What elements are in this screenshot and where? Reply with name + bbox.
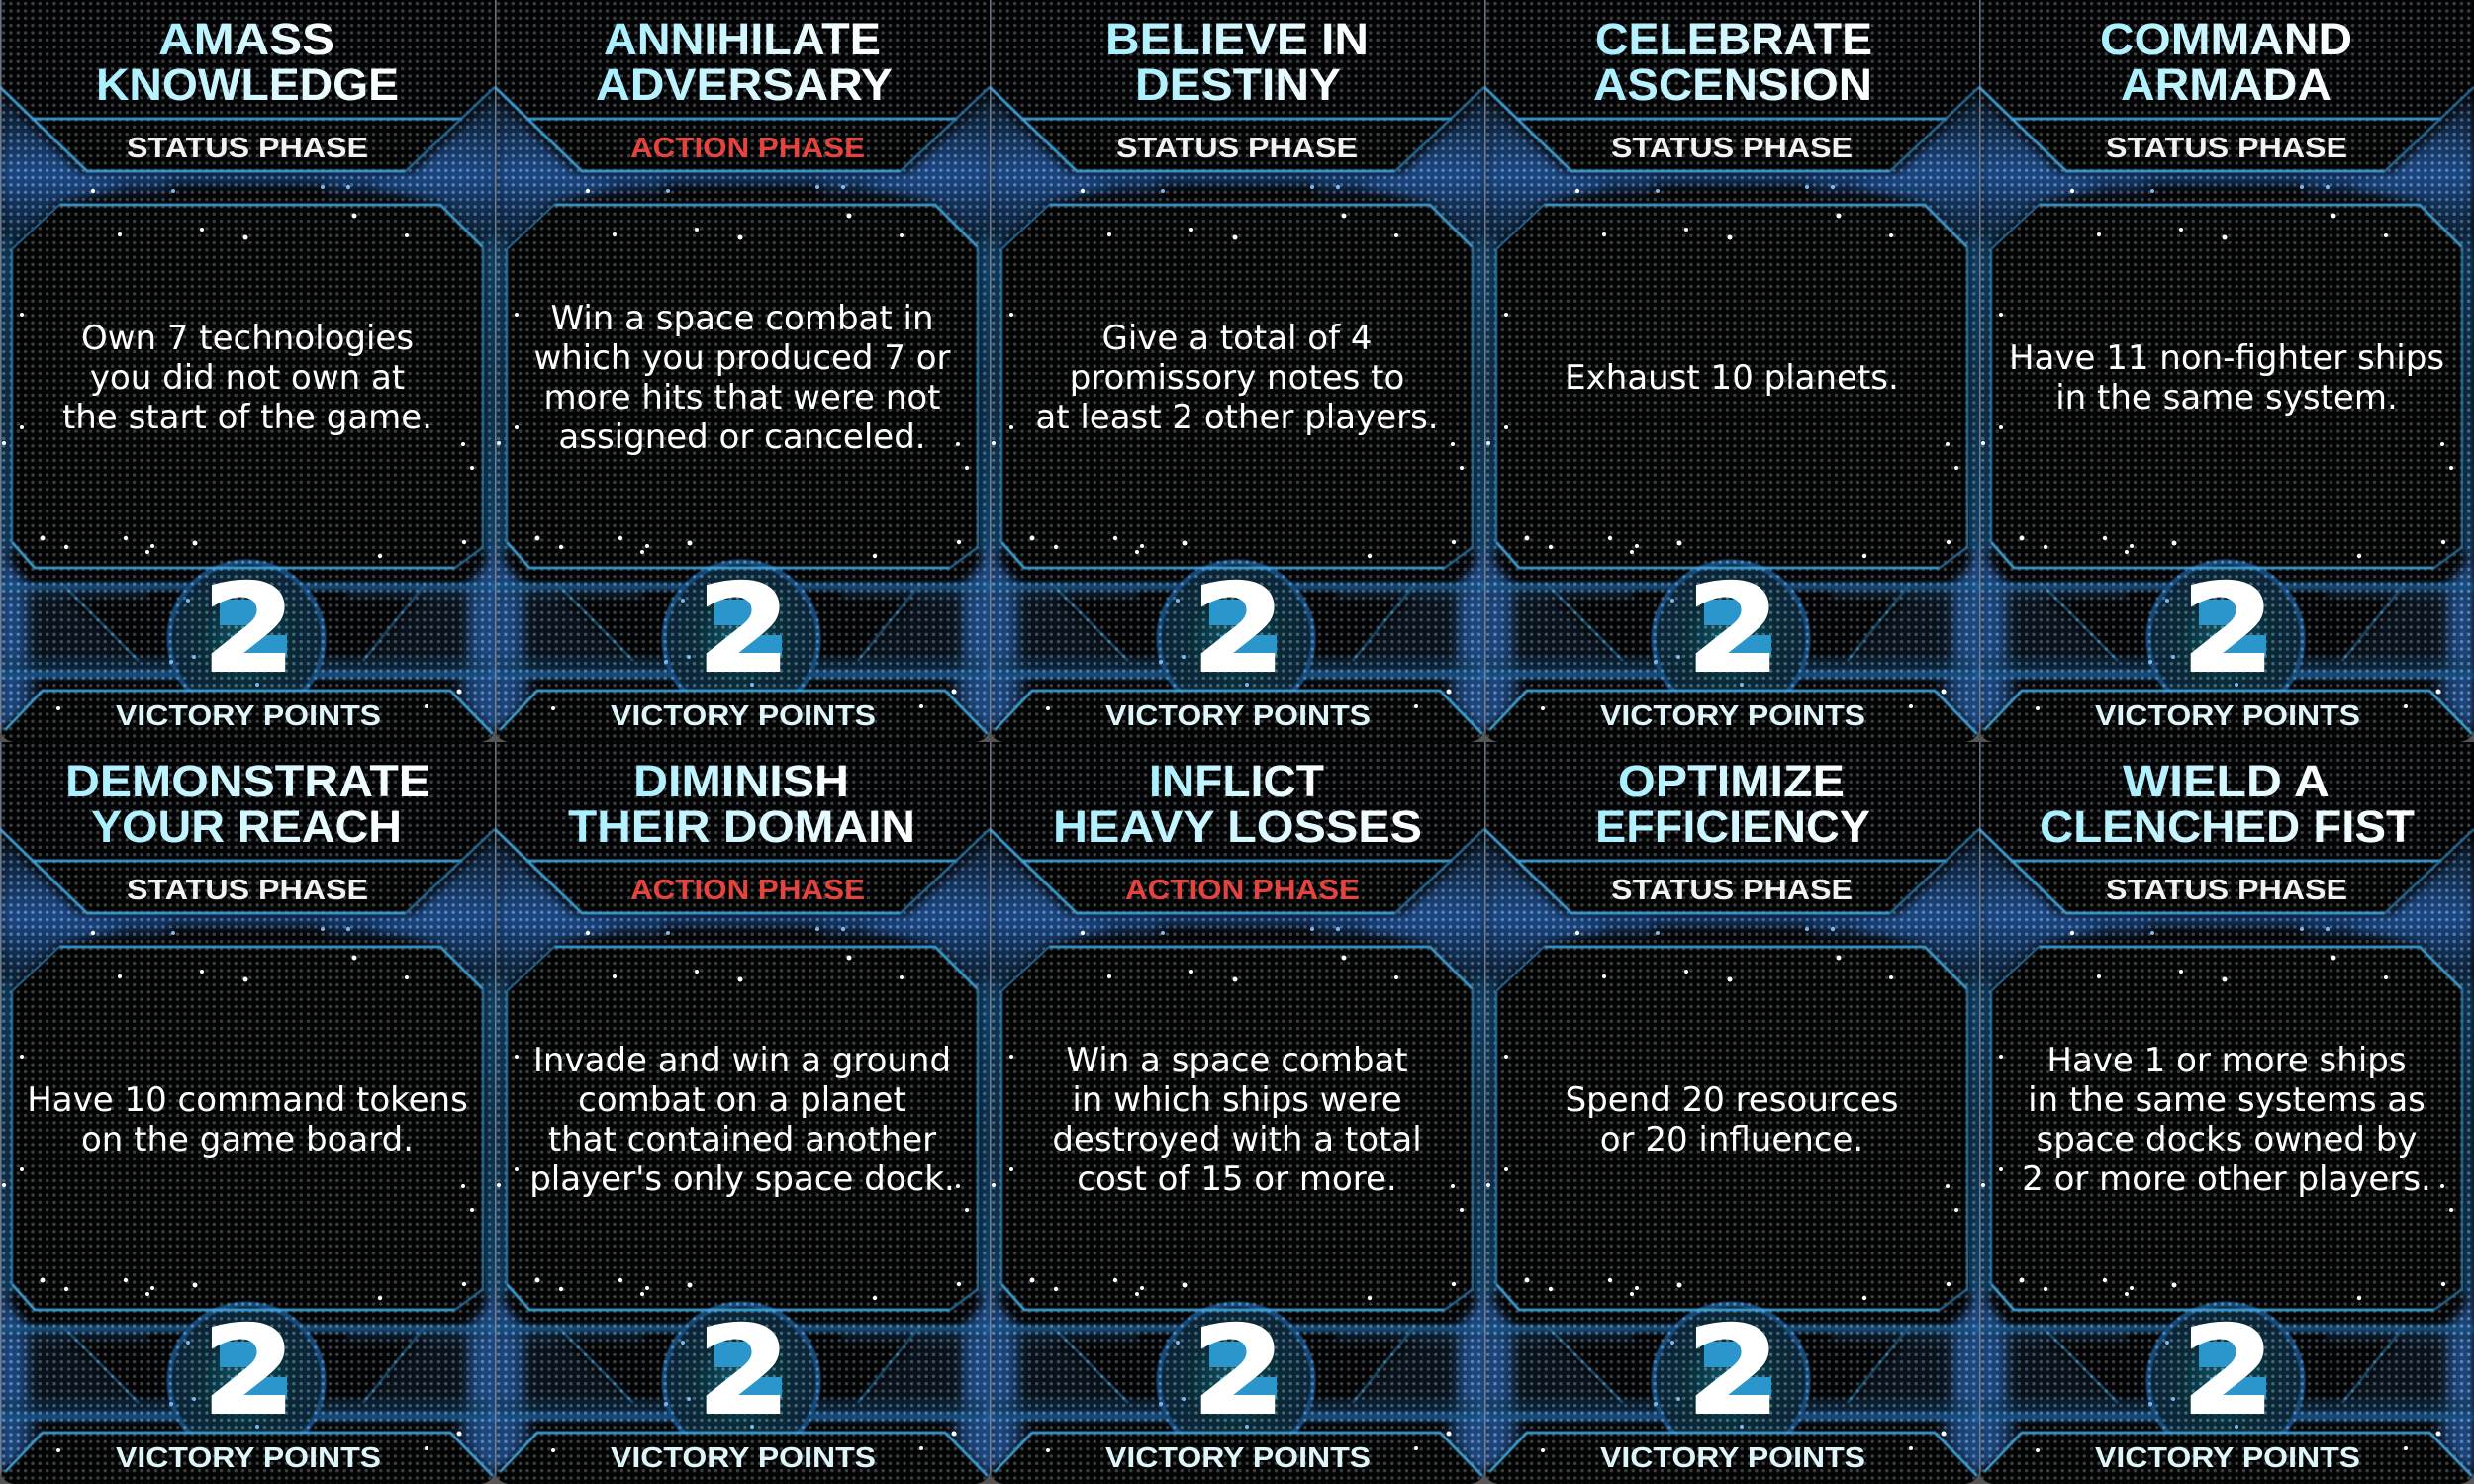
points badge: 2 [2181,559,2275,700]
objective text: cost of 15 or more. [1077,1159,1397,1199]
title: THEIR DOMAIN [568,801,915,852]
objective text: which you produced 7 or [533,338,951,378]
phase label: STATUS PHASE [1116,133,1358,164]
objective text: on the game board. [81,1120,414,1159]
title: EFFICIENCY [1595,801,1870,852]
victory points label: VICTORY POINTS [1600,700,1865,732]
card frame [0,0,495,742]
panel: Believe in Destiny card [990,0,1484,742]
title [1595,756,1870,852]
objective text: Win a space combat [1066,1041,1408,1080]
panel: Optimize Efficiency card [1484,742,1979,1484]
objective text: or 20 influence. [1600,1120,1863,1159]
victory points label: VICTORY POINTS [116,1442,381,1474]
objective text: promissory notes to [1070,358,1404,398]
objective text: that contained another [548,1120,936,1159]
objective text: destroyed with a total [1052,1120,1422,1159]
points badge: 2 [1686,559,1780,700]
objective text: player's only space dock. [529,1159,955,1199]
victory points label: VICTORY POINTS [2095,700,2360,732]
victory points label: VICTORY POINTS [1105,1442,1371,1474]
phase label: ACTION PHASE [1125,875,1360,906]
title: ASCENSION [1593,59,1872,110]
points badge: 2 [1686,1301,1780,1442]
phase label: STATUS PHASE [2106,875,2347,906]
card frame [1979,0,2474,742]
panel: Celebrate Ascension card [1484,0,1979,742]
points badge: 2 [202,559,296,700]
panel: Wield a Clenched Fist card [1979,742,2474,1484]
title: BELIEVE IN [1105,14,1369,64]
title [1593,14,1872,110]
objective text: space docks owned by [2036,1120,2418,1159]
title: DESTINY [1135,59,1341,110]
title: COMMAND [2100,14,2352,64]
objective text: more hits that were not [544,378,940,417]
title: INFLICT [1149,756,1324,806]
card frame [990,0,1484,742]
card frame [1484,742,1979,1484]
panel: Inflict Heavy Losses card [990,742,1484,1484]
card frame [1979,742,2474,1484]
objective text: you did not own at [90,358,405,398]
objective text: Have 1 or more ships [2046,1041,2407,1080]
phase label: ACTION PHASE [630,875,865,906]
card frame [1484,0,1979,742]
objective text: assigned or canceled. [558,417,926,457]
title: CLENCHED FIST [2040,801,2415,852]
objective text: Spend 20 resources [1566,1080,1898,1120]
title: CELEBRATE [1595,14,1872,64]
phase label: STATUS PHASE [2106,133,2347,164]
title [596,14,893,110]
title [96,14,399,110]
title: OPTIMIZE [1618,756,1845,806]
phase label: STATUS PHASE [1611,875,1853,906]
points badge: 2 [202,1301,296,1442]
panel: Demonstrate Your Reach card [0,742,495,1484]
title: DEMONSTRATE [65,756,430,806]
points badge: 2 [2181,1301,2275,1442]
panel: Amass Knowledge card [0,0,495,742]
title: WIELD A [2123,756,2330,806]
card frame [990,742,1484,1484]
victory points label: VICTORY POINTS [2095,1442,2360,1474]
victory points label: VICTORY POINTS [116,700,381,732]
objective text: in which ships were [1072,1080,1402,1120]
title: ANNIHILATE [604,14,881,64]
title: ARMADA [2121,59,2331,110]
title [65,756,430,852]
victory points label: VICTORY POINTS [611,1442,876,1474]
card frame [495,742,990,1484]
objective text: in the same systems as [2028,1080,2426,1120]
objective text: the start of the game. [62,398,432,437]
points badge: 2 [697,559,791,700]
objective text: Win a space combat in [550,299,934,338]
phase label: STATUS PHASE [127,133,368,164]
objective text: at least 2 other players. [1035,398,1439,437]
title: YOUR REACH [91,801,402,852]
card frame [495,0,990,742]
card frame [0,742,495,1484]
title [1053,756,1422,852]
title [568,756,915,852]
title: ADVERSARY [596,59,893,110]
objective text: Have 11 non-fighter ships [2009,338,2444,378]
objective text: in the same system. [2055,378,2398,417]
objective text: Invade and win a ground [533,1041,951,1080]
panel: Diminish Their Domain card [495,742,990,1484]
objective text: Exhaust 10 planets. [1565,358,1899,398]
panel: Annihilate Adversary card [495,0,990,742]
title [2040,756,2415,852]
points badge: 2 [1191,1301,1285,1442]
phase label: STATUS PHASE [1611,133,1853,164]
title [1105,14,1369,110]
objective text: 2 or more other players. [2022,1159,2431,1199]
objective text: Give a total of 4 [1101,319,1373,358]
title: DIMINISH [633,756,849,806]
points badge: 2 [1191,559,1285,700]
title: AMASS [158,14,334,64]
victory points label: VICTORY POINTS [1105,700,1371,732]
victory points label: VICTORY POINTS [611,700,876,732]
objective text: Have 10 command tokens [27,1080,468,1120]
objective text: Own 7 technologies [81,319,414,358]
title [2100,14,2352,110]
title: HEAVY LOSSES [1053,801,1422,852]
victory points label: VICTORY POINTS [1600,1442,1865,1474]
title: KNOWLEDGE [96,59,399,110]
points badge: 2 [697,1301,791,1442]
objective text: combat on a planet [578,1080,906,1120]
panel: Command Armada card [1979,0,2474,742]
phase label: STATUS PHASE [127,875,368,906]
phase label: ACTION PHASE [630,133,865,164]
